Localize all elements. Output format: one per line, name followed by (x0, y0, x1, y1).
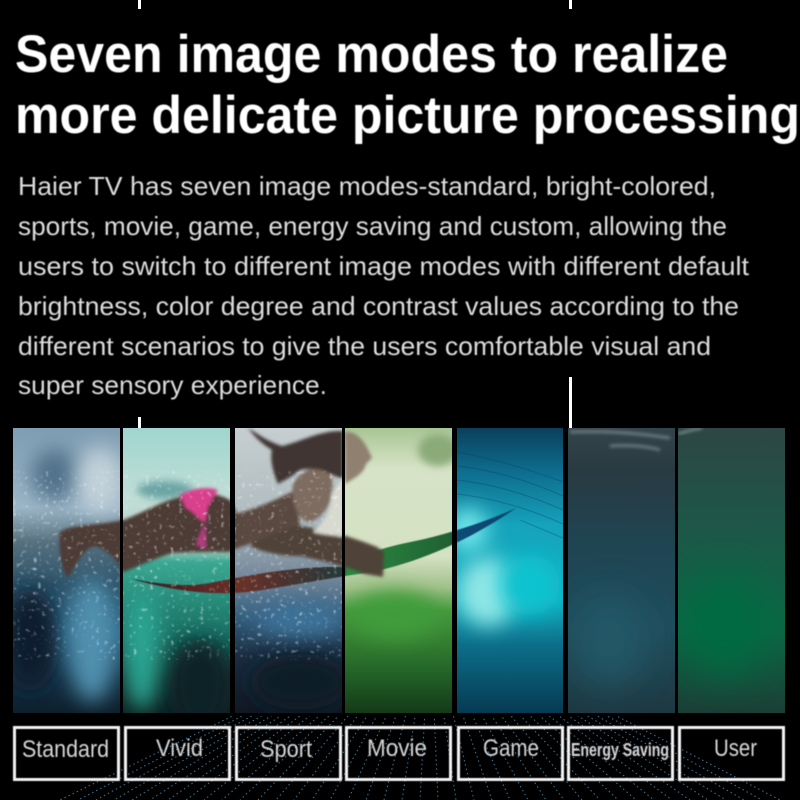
mode label text: Energy Saving (571, 740, 669, 760)
label box: Vivid (126, 728, 230, 780)
mode label text: Standard (22, 736, 109, 763)
body text: super sensory experience. (18, 370, 327, 400)
surfboard (132, 508, 516, 593)
panel separators (120, 428, 678, 713)
mode label text: Game (483, 735, 539, 762)
shirt (313, 478, 343, 537)
legs (59, 493, 238, 578)
title: Seven image modes to realize (15, 25, 728, 84)
top tick marks (138, 0, 572, 9)
panel: standard mode (13, 428, 120, 713)
hair (248, 428, 343, 484)
label box: Energy Saving (568, 728, 672, 780)
panel: game mode (448, 428, 563, 713)
body text: sports, movie, game, energy saving and custom, allowing the (18, 211, 727, 241)
shoulder (292, 468, 333, 522)
bikini (180, 488, 218, 522)
title (15, 25, 800, 145)
tick marks above photo (138, 377, 572, 428)
dotted perspective floor pattern (60, 716, 780, 800)
surfer (59, 428, 384, 578)
mode label text (22, 735, 757, 763)
body text: different scenarios to give the users comfortable visual and (18, 331, 711, 361)
body text: Haier TV has seven image modes-standard, bright-colored, (18, 171, 716, 201)
mode label text: Vivid (156, 735, 203, 762)
label box: User (680, 728, 784, 780)
arm and forearm (250, 525, 384, 577)
mode label text: User (714, 735, 757, 762)
panel: movie mode (345, 428, 458, 713)
panel: vivid mode (123, 428, 232, 731)
label box: Game (458, 728, 562, 780)
photo strip: surfer in seven image modes (0, 428, 785, 731)
label box: Sport (236, 728, 340, 780)
panel: sport mode (235, 428, 350, 713)
torso back (230, 490, 300, 550)
head (345, 432, 372, 484)
mode labels (14, 728, 784, 780)
panel: user mode (678, 428, 785, 713)
water spray over surfer (13, 470, 343, 660)
body text: users to switch to different image modes with different default (18, 251, 750, 281)
body text: brightness, color degree and contrast values according to the (18, 291, 739, 321)
label box: Movie (346, 728, 450, 780)
mode label text: Movie (367, 735, 427, 762)
panel: energy saving mode (568, 428, 675, 713)
mode label text: Sport (260, 736, 312, 763)
body text (18, 171, 750, 400)
label box: Standard (14, 728, 118, 780)
